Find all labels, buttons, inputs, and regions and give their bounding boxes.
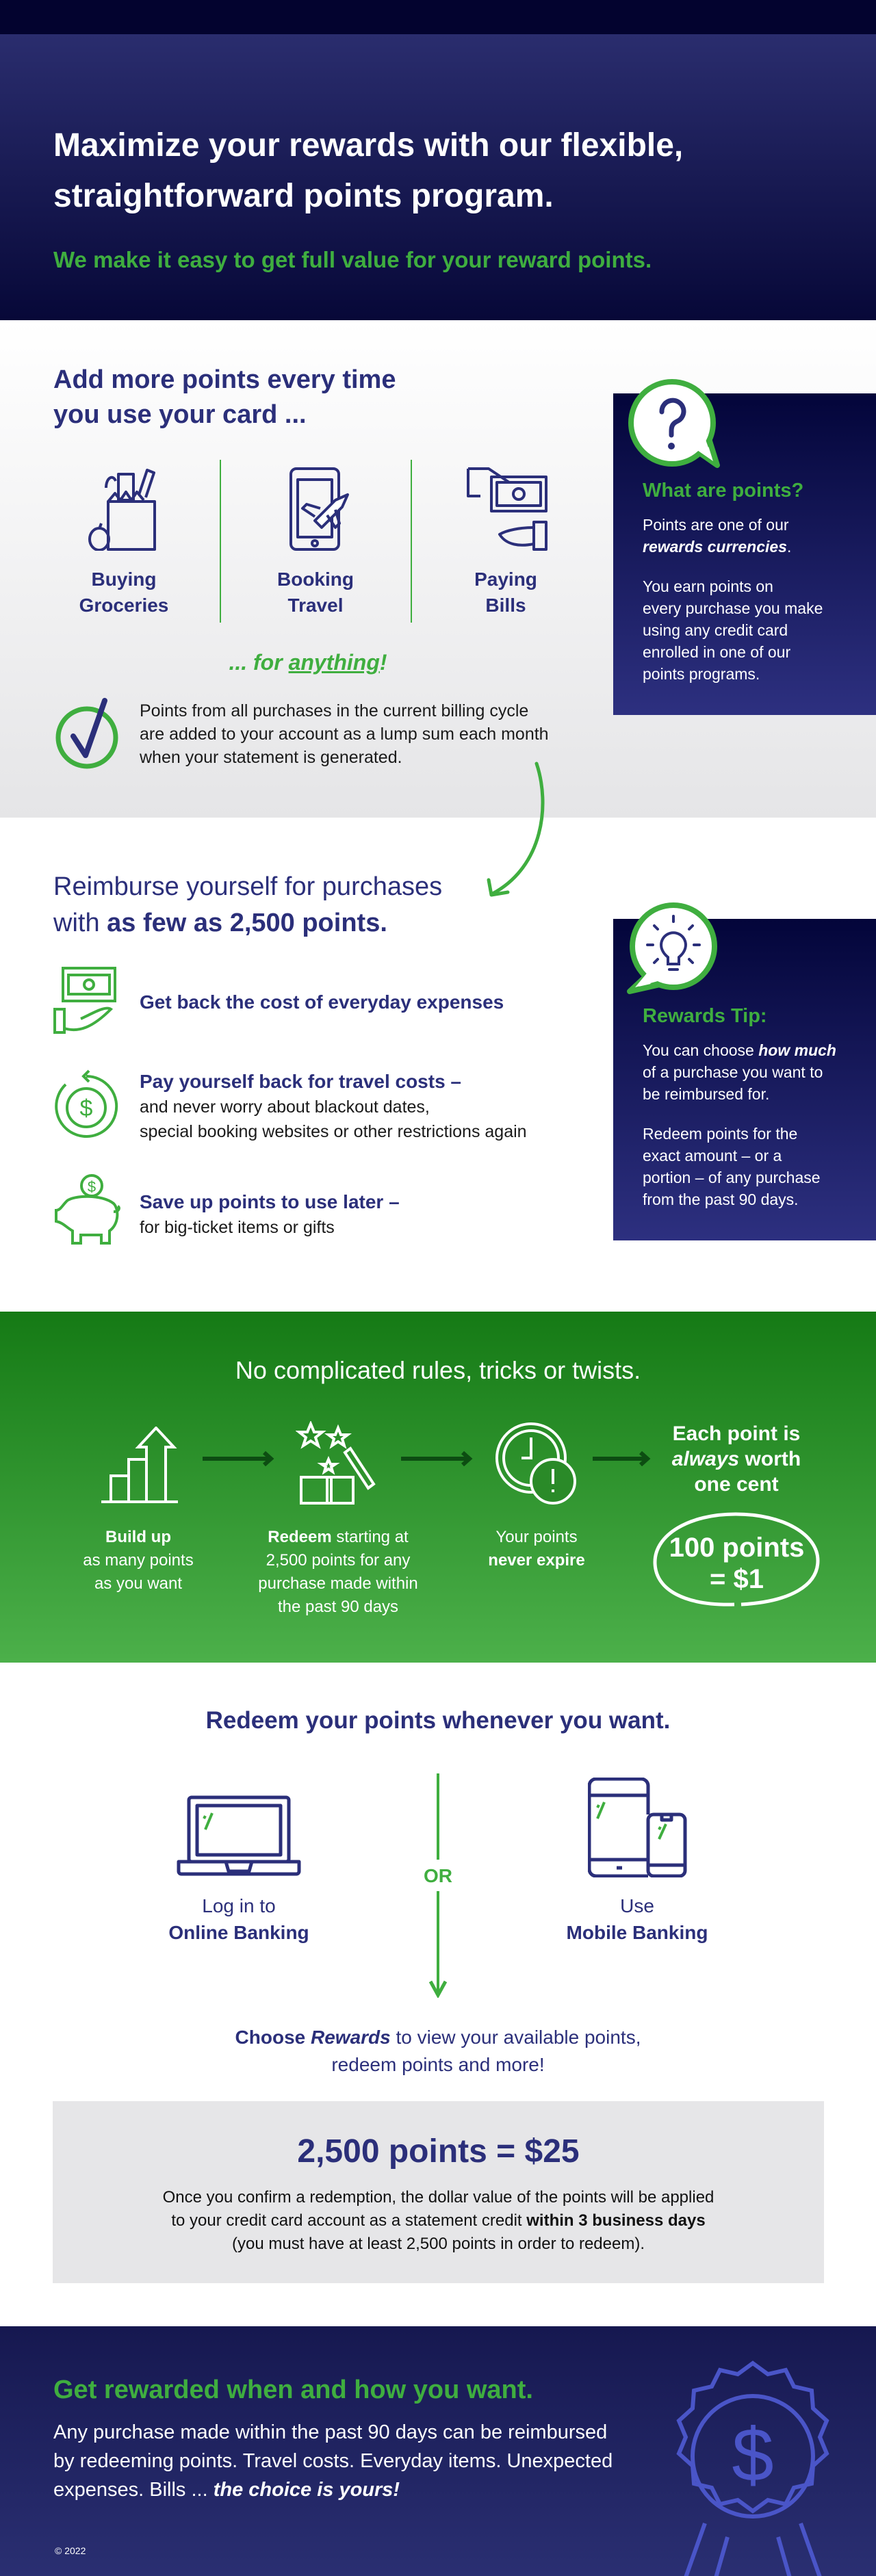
sidebar text: You can choose how much — [643, 1041, 836, 1059]
item: save up — [55, 1174, 400, 1245]
statement text: when your statement is generated. — [140, 748, 402, 767]
label: build up: as many points — [83, 1551, 194, 1570]
icon: cash hand — [53, 967, 116, 1034]
heading: you use your card ... — [53, 400, 307, 429]
item: everyday expenses — [53, 967, 504, 1034]
oval text: 100 points — [669, 1533, 804, 1563]
title — [53, 127, 683, 214]
footer text: expenses. Bills ... the choice is yours! — [53, 2479, 400, 2501]
label: never expire: Your points — [495, 1528, 578, 1546]
sidebar text: every purchase you make — [643, 599, 823, 617]
icon: laptop — [177, 1795, 301, 1876]
icon: dollar cycle — [55, 1070, 118, 1138]
choose rewards text: redeem points and more! — [331, 2054, 545, 2075]
arrow 1 — [203, 1451, 274, 1466]
box text — [53, 2186, 824, 2256]
copyright: © 2022 — [55, 2545, 86, 2556]
sidebar text: be reimbursed for. Redeem points for the — [643, 1085, 797, 1143]
sidebar text: enrolled in one of our — [643, 643, 790, 661]
choose rewards text: Choose Rewards to view your available points, — [235, 2027, 641, 2048]
curved arrow — [487, 762, 545, 896]
each point text: Each point is — [673, 1422, 800, 1445]
label: build up: as you want — [94, 1574, 182, 1593]
label: mobile banking: Mobile Banking — [567, 1922, 708, 1943]
section: reimburse — [53, 872, 876, 1245]
label: never expire — [488, 1528, 585, 1570]
label: booking travel: Booking — [277, 569, 354, 590]
heading — [53, 365, 396, 429]
icon: paying bills — [467, 467, 548, 551]
sidebar text: of a purchase you want to — [643, 1063, 823, 1081]
label: build up — [83, 1528, 194, 1593]
label: online banking — [136, 1892, 342, 1946]
oval: 100 points = $1 — [653, 1512, 820, 1606]
sidebar text: portion – of any purchase — [643, 1169, 821, 1186]
top bar — [0, 0, 876, 34]
heading — [53, 872, 442, 937]
section: add more points — [0, 320, 876, 818]
divider right — [411, 460, 412, 623]
or label: OR — [424, 1865, 452, 1886]
label: redeem: 2,500 points for any — [266, 1551, 410, 1570]
box text: Once you confirm a redemption, the dollar value of the points will be applied — [163, 2188, 714, 2207]
icon: check circle — [56, 698, 118, 769]
icon: groceries — [88, 469, 156, 551]
statement text — [140, 701, 549, 767]
text — [140, 1191, 400, 1237]
sidebar heading: Rewards Tip: — [643, 1005, 767, 1027]
sidebar text: using any credit card — [643, 621, 788, 639]
label: mobile banking: Use — [620, 1895, 654, 1916]
item: travel costs — [55, 1070, 527, 1141]
oval text — [669, 1533, 804, 1594]
box heading: 2,500 points = $25 — [297, 2133, 580, 2170]
box text: to your credit card account as a statement credit within 3 business days — [171, 2211, 706, 2230]
icon: travel phone — [289, 467, 349, 551]
label: redeem: Redeem starting at — [268, 1528, 409, 1546]
heading: Redeem your points whenever you want. — [206, 1707, 670, 1734]
footer heading: Get rewarded when and how you want. — [53, 2376, 533, 2404]
label: booking travel: Travel — [288, 595, 343, 616]
each point text: always worth — [672, 1448, 801, 1470]
label: build up: Build up — [105, 1528, 171, 1546]
statement text: Points from all purchases in the current billing cycle — [140, 701, 528, 720]
heading: Add more points every time — [53, 365, 396, 394]
label: paying bills: Paying — [474, 569, 537, 590]
label: buying groceries: Buying — [92, 569, 156, 590]
text: and never worry about blackout dates, — [140, 1097, 430, 1117]
each point text: one cent — [694, 1473, 779, 1496]
text: Get back the cost of everyday expenses — [140, 991, 504, 1013]
section: redeem whenever — [53, 1707, 824, 2283]
heading: Reimburse yourself for purchases — [53, 872, 442, 901]
heading: with as few as 2,500 points. — [53, 909, 387, 937]
label: redeem: purchase made within — [258, 1574, 418, 1593]
sidebar text: You earn points on — [643, 577, 773, 595]
text: Save up points to use later – — [140, 1191, 400, 1212]
label: paying bills: Bills — [485, 595, 526, 616]
footer text: by redeeming points. Travel costs. Everyday items. Unexpected — [53, 2450, 613, 2472]
or divider — [417, 1772, 459, 2001]
title: straightforward points program. — [53, 178, 554, 214]
sidebar text — [643, 1041, 836, 1208]
each point text — [672, 1422, 801, 1496]
for anything: ... for anything! — [229, 650, 387, 675]
icon: clock alert — [495, 1422, 576, 1505]
icon: piggy bank: $ — [88, 1178, 96, 1195]
icon: piggy bank — [55, 1174, 120, 1245]
label: online banking: Online Banking — [168, 1922, 309, 1943]
label: redeem — [258, 1528, 418, 1616]
sidebar text — [643, 516, 823, 683]
section: no complicated rules — [0, 1312, 876, 1663]
footer — [0, 2326, 876, 2576]
label: buying groceries: Groceries — [79, 595, 168, 616]
icon: rosette — [654, 2359, 852, 2576]
oval text: = $1 — [710, 1564, 764, 1594]
arrow 3 — [593, 1451, 650, 1466]
icon: question bubble — [628, 379, 720, 468]
label: mobile banking — [534, 1892, 740, 1946]
subtitle: We make it easy to get full value for your reward points. — [53, 247, 652, 272]
header — [0, 34, 876, 320]
icon: growth chart — [101, 1427, 178, 1503]
divider left — [220, 460, 221, 623]
sidebar: what are points — [613, 393, 876, 715]
sidebar heading: What are points? — [643, 480, 803, 502]
footer text: Any purchase made within the past 90 days can be reimbursed — [53, 2421, 607, 2443]
arrow 2 — [401, 1451, 472, 1466]
label: buying groceries — [79, 569, 168, 616]
label: booking travel — [277, 569, 354, 616]
sidebar text: exact amount – or a — [643, 1147, 782, 1165]
panel: 2500 points box — [53, 2101, 824, 2283]
text: special booking websites or other restrictions again — [140, 1122, 527, 1141]
label: never expire: never expire — [488, 1551, 585, 1570]
choose rewards text — [0, 2024, 876, 2079]
box text: (you must have at least 2,500 points in order to redeem). — [232, 2235, 645, 2253]
sidebar text: Points are one of our — [643, 516, 789, 534]
icon: gift stars — [296, 1421, 376, 1505]
heading: No complicated rules, tricks or twists. — [235, 1356, 641, 1384]
sidebar: rewards tip — [613, 919, 876, 1240]
text: for big-ticket items or gifts — [140, 1218, 335, 1237]
text: Pay yourself back for travel costs – — [140, 1071, 461, 1092]
statement text: are added to your account as a lump sum each month — [140, 725, 549, 744]
title: Maximize your rewards with our flexible, — [53, 127, 683, 164]
icon: dollar cycle: $ — [80, 1095, 93, 1121]
footer text — [53, 2418, 656, 2504]
sidebar text: points programs. — [643, 665, 760, 683]
label: paying bills — [474, 569, 537, 616]
icon: tablet and phone — [588, 1778, 688, 1877]
sidebar text: rewards currencies. — [643, 538, 791, 556]
icon: lightbulb bubble — [627, 902, 717, 994]
label: redeem: the past 90 days — [278, 1598, 398, 1616]
sidebar text: from the past 90 days. — [643, 1191, 799, 1208]
icon: rosette: $ — [732, 2413, 774, 2497]
text — [140, 1071, 527, 1141]
label: online banking: Log in to — [202, 1895, 276, 1916]
